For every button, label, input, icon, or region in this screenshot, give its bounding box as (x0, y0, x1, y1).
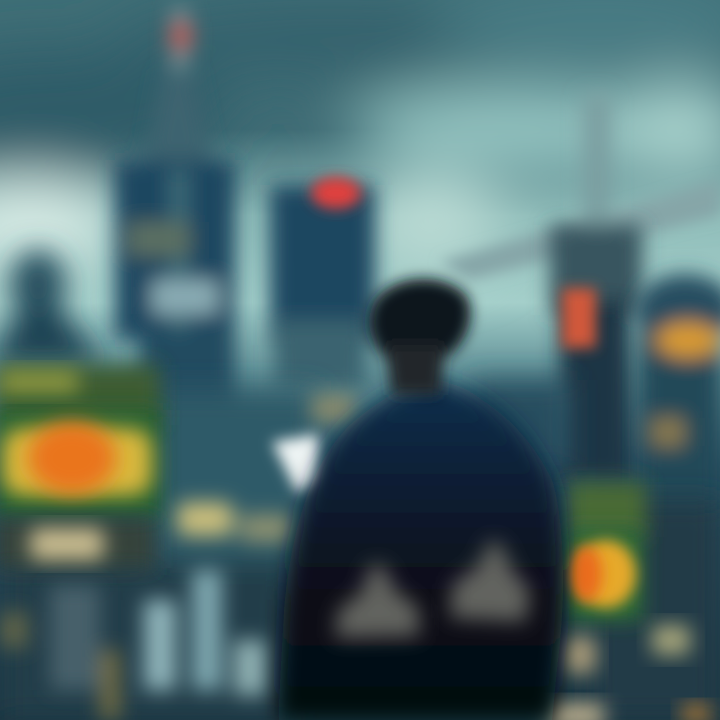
man: dark jacket silhouette from behind (278, 279, 563, 720)
right tower with red sign (550, 95, 642, 480)
left tower with spire (115, 5, 235, 470)
right billboard: green and orange sign (548, 482, 710, 720)
red sign on right tower (562, 288, 596, 348)
man: head (369, 279, 471, 395)
right domed building with orange sign (635, 274, 720, 520)
left billboard: green and orange signs (0, 365, 160, 568)
red dome on center tower (311, 177, 361, 209)
lower street haze (0, 380, 720, 720)
center tower with red dome (270, 185, 375, 390)
center street signs (177, 395, 354, 542)
man: jacket left emblem (335, 565, 420, 638)
man: jacket right emblem (450, 540, 530, 622)
white paper held by man (272, 434, 320, 494)
lower left buildings (0, 570, 266, 720)
right overhead bridge beam (440, 180, 720, 280)
left distant domed building (0, 250, 105, 365)
